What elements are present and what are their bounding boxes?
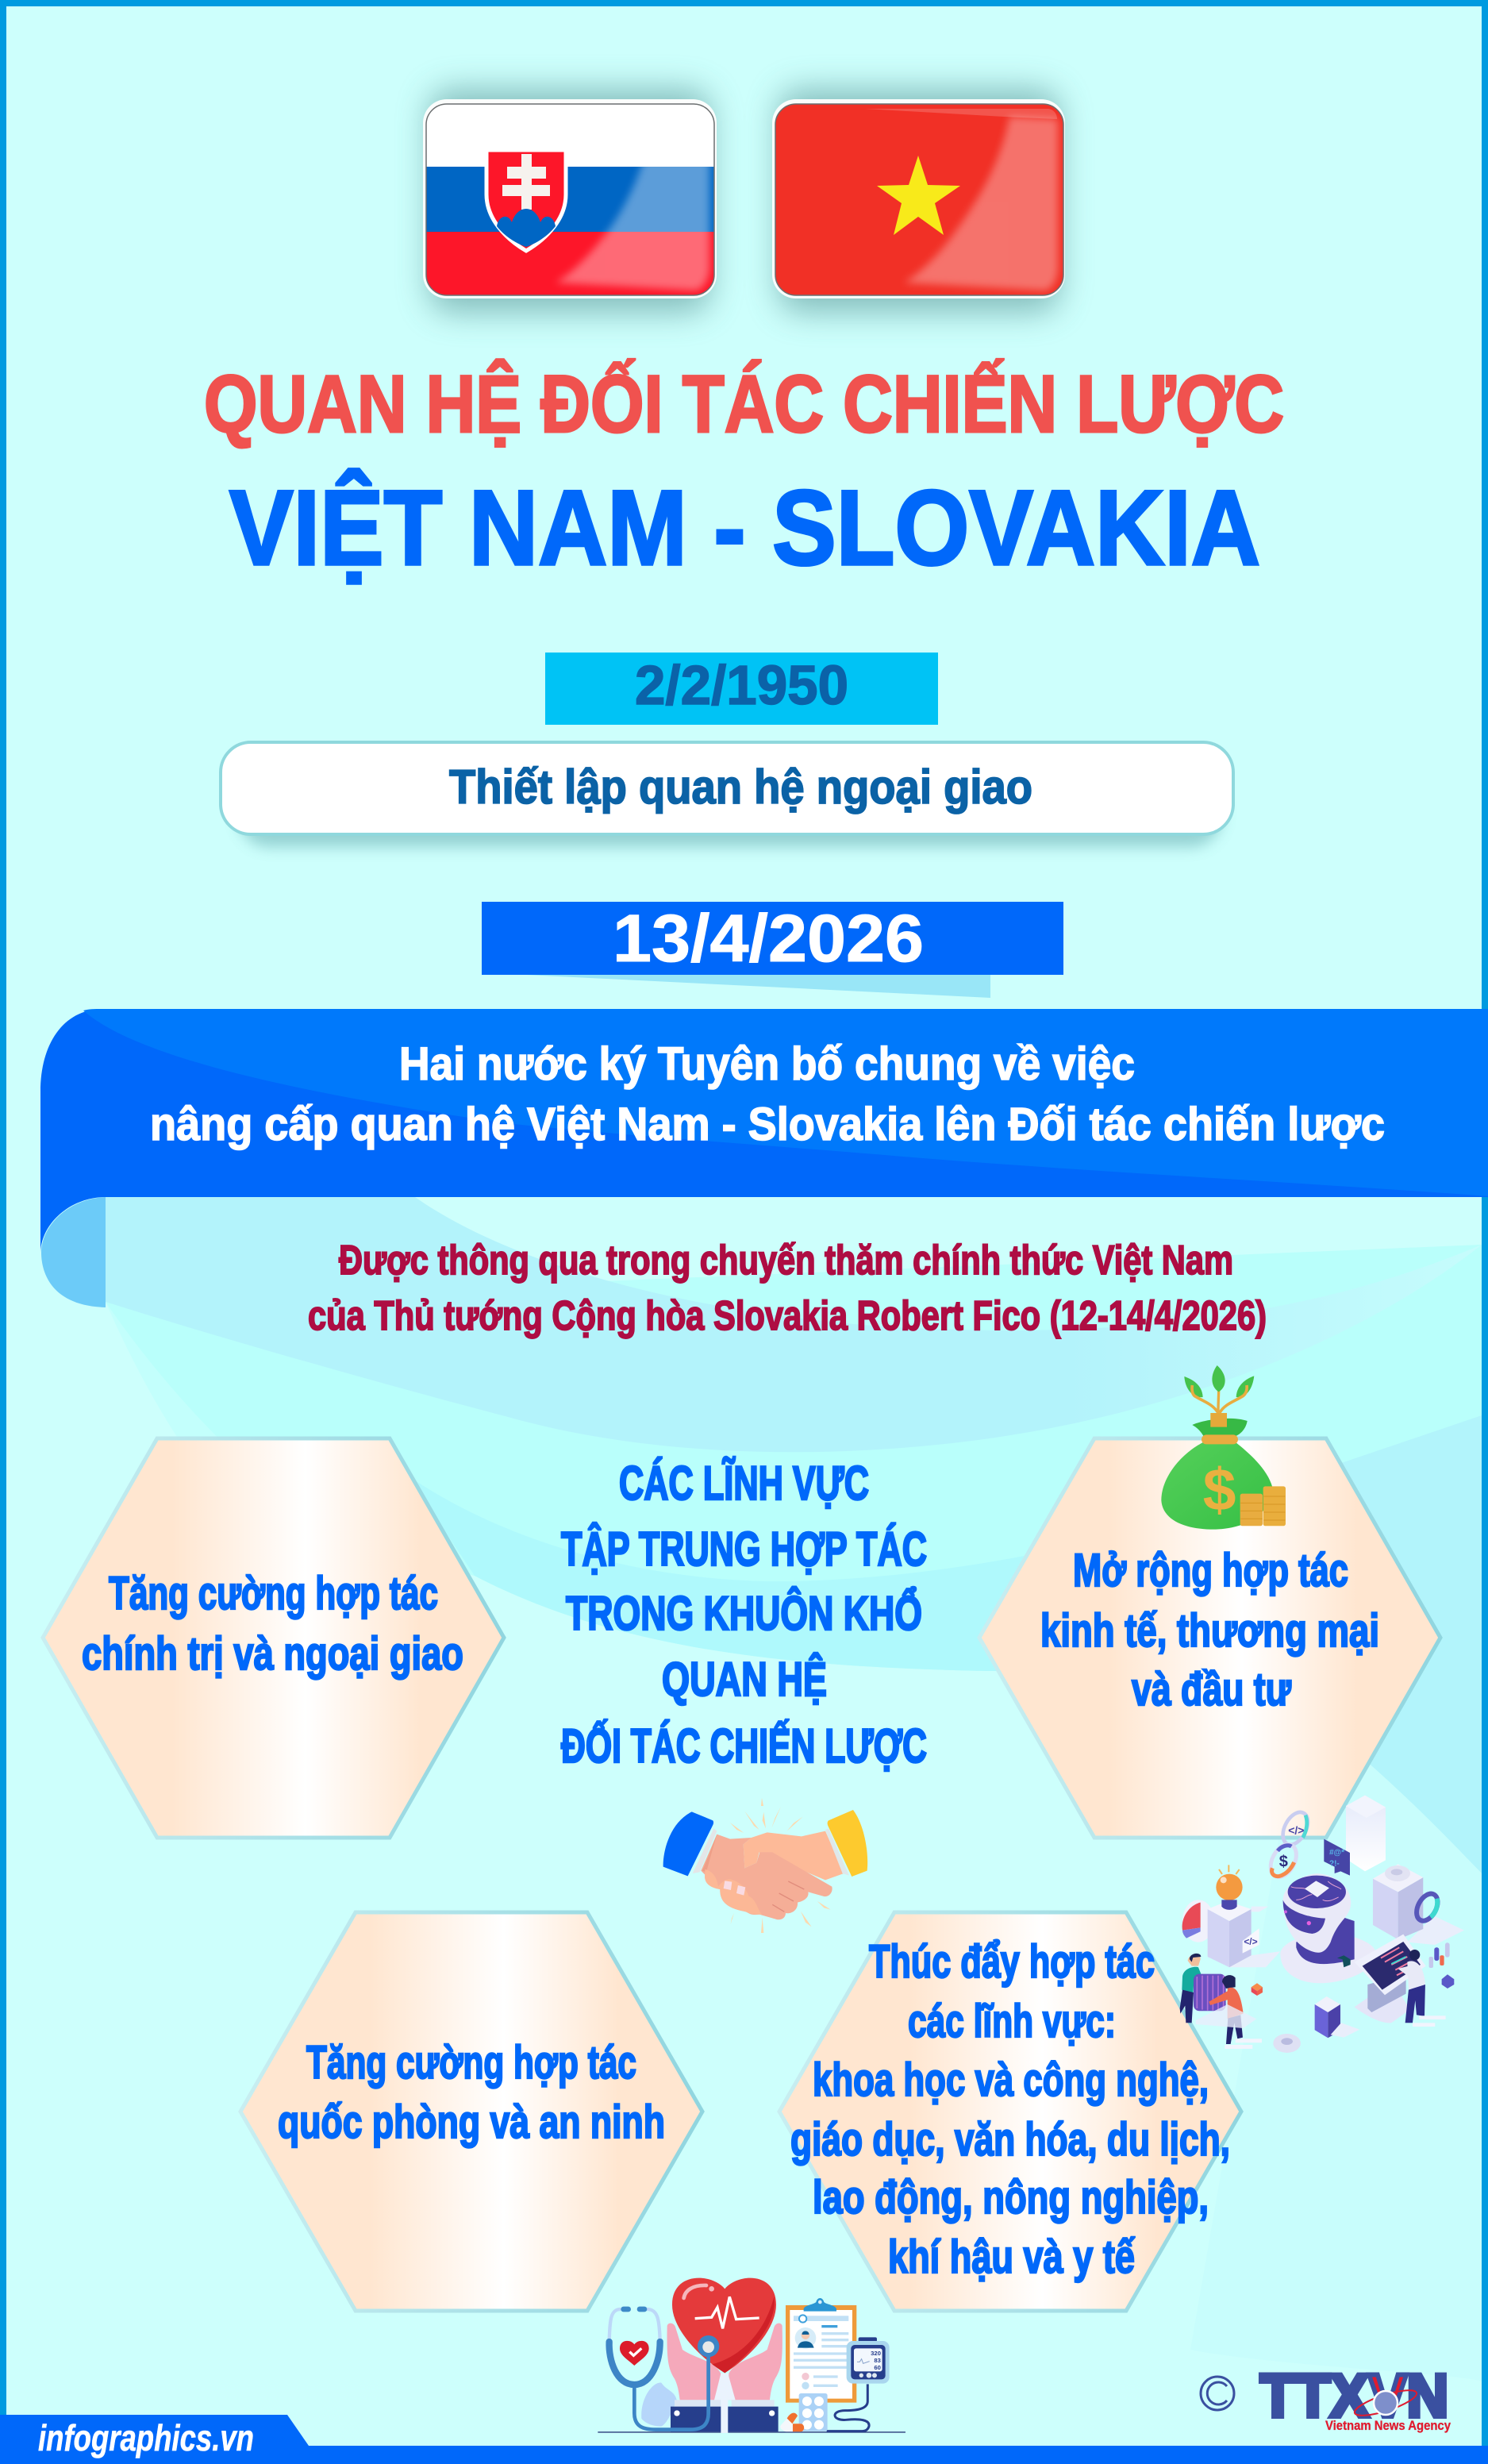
icon: light bulb block (1208, 1865, 1280, 1967)
icon: man at kiosk (1398, 1950, 1446, 2027)
date box: 2/2/1950: 2/2/1950 (635, 654, 848, 716)
icon: ring with dollar: $ (1279, 1854, 1288, 1871)
icon: people carrying box (1180, 1954, 1262, 2049)
icon: globe with orbit (1352, 2385, 1419, 2420)
heading: cooperation fields (561, 1457, 927, 1773)
panel: defence and security (240, 1912, 702, 2311)
icon: technology isometric illustration (1180, 1796, 1464, 2053)
pill: diplomatic relations (221, 742, 1233, 847)
icon: ring with code (1278, 1808, 1313, 1849)
icon: data speech card: #@* (1329, 1849, 1344, 1858)
icon: leaf (641, 2383, 677, 2427)
panel: politics and diplomacy (43, 1438, 504, 1838)
icon: copyright (1201, 2377, 1234, 2410)
icon: stethoscope (609, 2307, 719, 2430)
title: QUAN HỆ ĐỐI TÁC CHIẾN LƯỢC (204, 359, 1284, 449)
icon: data speech card: ?!- (1329, 1860, 1340, 1869)
footer bar (0, 2415, 1488, 2464)
icon: ribbon fold (41, 1197, 106, 1307)
icon: small figures (1337, 1955, 1351, 1967)
icon: star (877, 156, 960, 235)
panel: defence and security: quốc phòng và an ninh (278, 2096, 665, 2148)
icon: robot head (1280, 1873, 1375, 1983)
icon: medical care (598, 2278, 905, 2433)
logo: TTXVN: TTXVN (1260, 2362, 1448, 2430)
panel: economy, trade and investment: kinh tế, thương mại (1040, 1605, 1379, 1657)
icon: light bulb block: </> (1244, 1936, 1258, 1947)
subtitle: official visit: của Thủ tướng Cộng hòa Slovakia Robert Fico (12-14/4/2026) (308, 1293, 1267, 1339)
heading: cooperation fields: QUAN HỆ (662, 1653, 827, 1706)
icon: heart with pulse (672, 2278, 776, 2373)
ribbon banner (40, 1009, 1488, 1307)
icon: caring hands (667, 2323, 782, 2433)
icon: blood pressure monitor (827, 2337, 890, 2431)
icon: coat of arms (486, 150, 566, 251)
pill: diplomatic relations: Thiết lập quan hệ ngoại giao (449, 760, 1032, 814)
icon: pills (780, 2393, 828, 2431)
panel: science, education, culture and other fields (779, 1912, 1241, 2311)
icon: blood pressure monitor: 60 (874, 2364, 881, 2371)
heading: cooperation fields: TRONG KHUÔN KHỔ (566, 1587, 922, 1640)
icon: money bag (1161, 1365, 1286, 1530)
panel: economy, trade and investment: và đầu tư (1132, 1664, 1291, 1715)
flag: Slovakia (423, 89, 717, 313)
icon: touch screen kiosk (1355, 1935, 1426, 2023)
icon: data speech card (1324, 1839, 1350, 1876)
icon: small cubes and gear (1252, 1942, 1454, 2053)
icon: blood pressure monitor: 320 (871, 2350, 881, 2357)
heading: cooperation fields: CÁC LĨNH VỰC (619, 1457, 869, 1510)
icon: handshake (663, 1798, 867, 1933)
panel: science, education, culture and other fields: giáo dục, văn hóa, du lịch, (790, 2114, 1230, 2166)
ribbon banner: nâng cấp quan hệ Việt Nam - Slovakia lên Đối tác chiến lược (150, 1099, 1385, 1150)
panel: science, education, culture and other fields: Thúc đẩy hợp tác (869, 1936, 1155, 1988)
icon: blood pressure monitor: 83 (874, 2357, 881, 2364)
icon: medical record clipboard (786, 2298, 856, 2403)
icon: tall white prism (1346, 1796, 1386, 1871)
panel: politics and diplomacy: chính trị và ngoại giao (82, 1628, 463, 1680)
panel: politics and diplomacy: Tăng cường hợp tác (109, 1568, 438, 1619)
panel: science, education, culture and other fields: khí hậu và y tế (888, 2231, 1136, 2283)
footer bar: infographics.vn (38, 2417, 254, 2458)
panel: science, education, culture and other fields: lao động, nông nghiệp, (813, 2172, 1209, 2223)
logo: TTXVN: Vietnam News Agency (1325, 2418, 1451, 2433)
date box: 13/4/2026: 13/4/2026 (613, 901, 924, 976)
heading: cooperation fields: ĐỐI TÁC CHIẾN LƯỢC (561, 1719, 927, 1773)
icon: money bag: $ (1203, 1457, 1236, 1523)
panel: science, education, culture and other fields: các lĩnh vực: (908, 1996, 1116, 2047)
panel: economy, trade and investment (979, 1438, 1440, 1838)
date box: 13/4/2026 (482, 901, 1063, 998)
flags (423, 89, 1065, 313)
icon: gear block (1373, 1864, 1464, 1945)
subtitle: official visit: Được thông qua trong chuyến thăm chính thức Việt Nam (339, 1238, 1233, 1284)
date box: 2/2/1950 (545, 653, 938, 725)
title (204, 359, 1284, 587)
panel: science, education, culture and other fields: khoa học và công nghệ, (813, 2054, 1209, 2106)
icon: pie chart (1182, 1900, 1214, 1942)
ribbon banner: Hai nước ký Tuyên bố chung về việc (399, 1038, 1135, 1090)
icon: ring with code: </> (1288, 1824, 1304, 1837)
flag: Vietnam (772, 89, 1065, 313)
heading: cooperation fields: TẬP TRUNG HỢP TÁC (561, 1523, 927, 1576)
title: VIỆT NAM - SLOVAKIA (229, 469, 1260, 587)
subtitle: official visit (308, 1238, 1267, 1339)
icon: ring with dollar (1266, 1840, 1302, 1881)
panel: economy, trade and investment: Mở rộng hợp tác (1073, 1545, 1348, 1596)
panel: defence and security: Tăng cường hợp tác (306, 2037, 636, 2089)
